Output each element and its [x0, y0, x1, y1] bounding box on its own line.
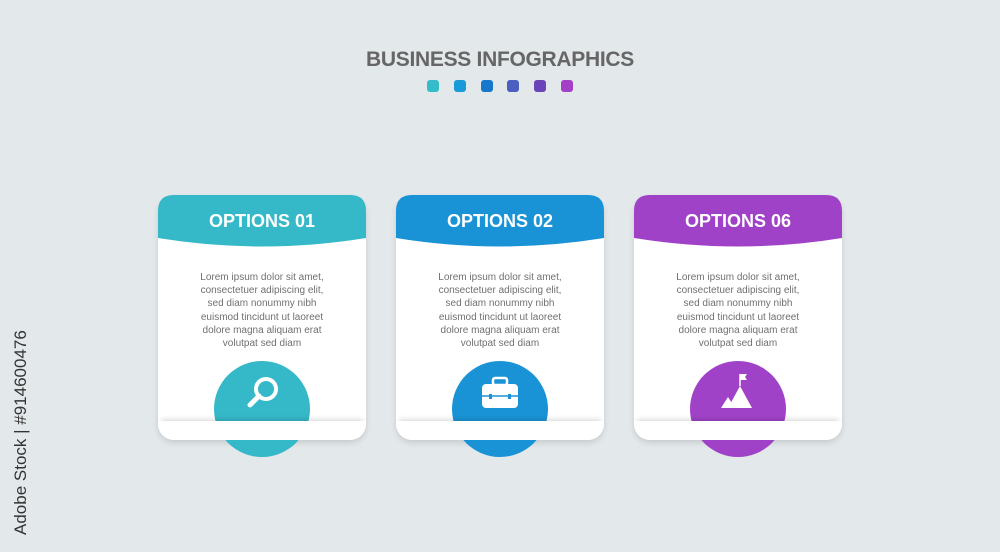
panel: option 01 — [156, 195, 368, 457]
text 02 — [438, 272, 562, 349]
text 02: sed diam nonummy nibh — [446, 298, 554, 309]
text 06: dolore magna aliquam erat — [679, 325, 797, 336]
title: BUSINESS INFOGRAPHICS — [366, 48, 634, 71]
header 01 — [158, 195, 366, 246]
text 06: euismod tincidunt ut laoreet — [677, 312, 799, 323]
panel: option 06 — [632, 195, 844, 457]
icon: briefcase — [482, 376, 518, 408]
text 06 — [676, 272, 800, 349]
text 02: Lorem ipsum dolor sit amet, — [438, 272, 562, 283]
text 02: consectetuer adipiscing elit, — [439, 285, 561, 296]
text 02: dolore magna aliquam erat — [441, 325, 559, 336]
circle 01 — [214, 361, 310, 457]
watermark vertical text: Adobe Stock | #914600476 — [11, 330, 30, 535]
header 02 — [396, 195, 604, 246]
heading 01: OPTIONS 01 — [209, 211, 315, 231]
panel: option 02 — [394, 195, 606, 457]
heading 06: OPTIONS 06 — [685, 211, 791, 231]
text 02: euismod tincidunt ut laoreet — [439, 312, 561, 323]
text 01: volutpat sed diam — [223, 338, 301, 349]
text 06: volutpat sed diam — [699, 338, 777, 349]
text 01 — [200, 272, 324, 349]
text 01: consectetuer adipiscing elit, — [201, 285, 323, 296]
text 06: Lorem ipsum dolor sit amet, — [676, 272, 800, 283]
circle 02 — [452, 361, 548, 457]
icon: magnifier — [248, 377, 278, 408]
text 01: euismod tincidunt ut laoreet — [201, 312, 323, 323]
icon: mountain flag — [721, 374, 752, 408]
text 01: Lorem ipsum dolor sit amet, — [200, 272, 324, 283]
color dots — [427, 80, 573, 92]
text 01: sed diam nonummy nibh — [208, 298, 316, 309]
text 06: consectetuer adipiscing elit, — [677, 285, 799, 296]
heading 02: OPTIONS 02 — [447, 211, 553, 231]
header 06 — [634, 195, 842, 246]
text 01: dolore magna aliquam erat — [203, 325, 321, 336]
text 06: sed diam nonummy nibh — [684, 298, 792, 309]
circle 06 — [690, 361, 786, 457]
text 02: volutpat sed diam — [461, 338, 539, 349]
